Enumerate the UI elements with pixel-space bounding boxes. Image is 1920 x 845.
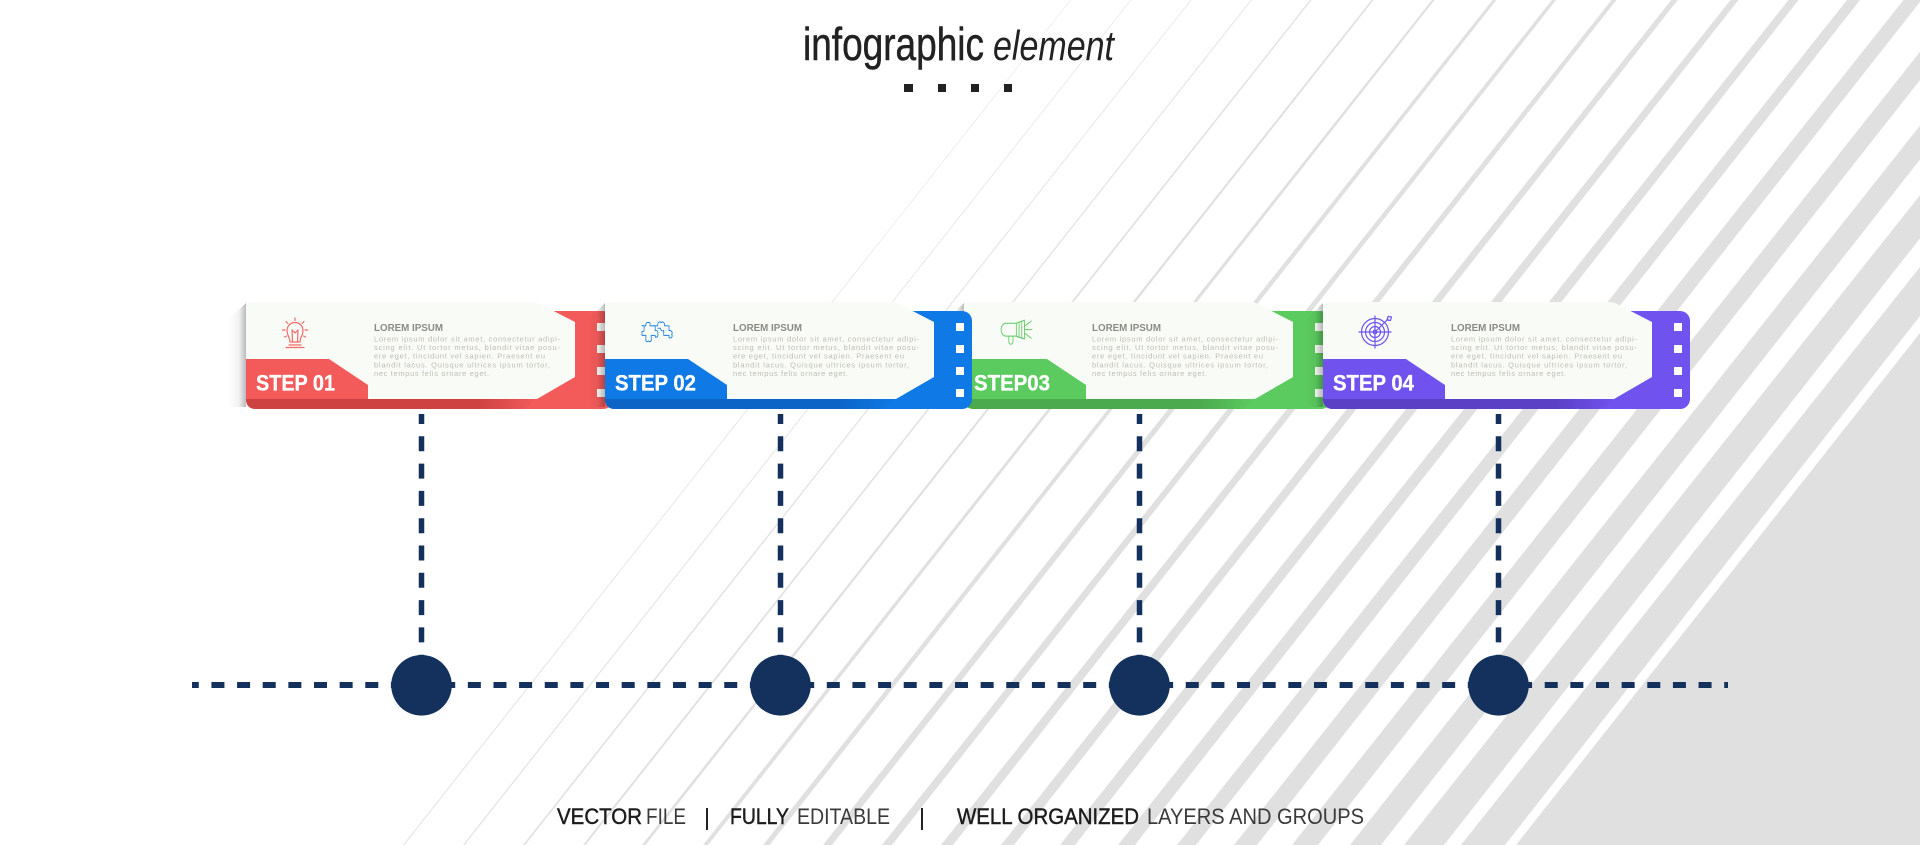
step label tab: STEP 04	[1333, 370, 1415, 396]
text block: nec tempus felis ornare eget.	[1451, 369, 1566, 378]
panel: step 03	[946, 302, 1331, 409]
icon: target	[1359, 316, 1392, 348]
text block: blandit lacus. Quisque ultrices ipsum tortor,	[374, 360, 550, 369]
connector: step 03	[1137, 414, 1142, 656]
text block: LOREM IPSUM	[1451, 322, 1520, 334]
footer caption: FILE	[646, 804, 686, 829]
step label tab: STEP 02	[615, 370, 696, 396]
text block: LOREM IPSUM	[1092, 322, 1161, 334]
title: infographic	[803, 18, 984, 70]
step label tab	[1323, 359, 1445, 399]
text block: ere eget, tincidunt vel sapien. Praesent eu	[1451, 352, 1622, 360]
text block	[1092, 322, 1278, 378]
text block: blandit lacus. Quisque ultrices ipsum tortor,	[1092, 360, 1268, 369]
text block	[1451, 322, 1638, 378]
text block: LOREM IPSUM	[733, 322, 802, 334]
connector: step 04	[1496, 414, 1501, 656]
side perforations	[1674, 323, 1682, 397]
step label tab	[605, 359, 727, 399]
timeline node: step 01	[391, 655, 452, 716]
text block: ere eget, tincidunt vel sapien. Praesent eu	[374, 352, 545, 360]
timeline dashed axis	[192, 682, 1728, 688]
step label tab: STEP 01	[256, 370, 335, 396]
icon: puzzle	[642, 322, 672, 342]
text block: Lorem ipsum dolor sit amet, consectetur adipi-	[733, 335, 920, 344]
text block: scing elit. Ut tortor metus, blandit vitae posu-	[1092, 343, 1278, 352]
timeline node: step 03	[1109, 655, 1170, 716]
panel: step 01	[228, 302, 613, 409]
footer caption: EDITABLE	[797, 804, 890, 829]
step label tab	[246, 359, 368, 399]
footer caption	[557, 804, 1364, 830]
text block: scing elit. Ut tortor metus, blandit vitae posu-	[1451, 343, 1638, 352]
text block: ere eget, tincidunt vel sapien. Praesent eu	[733, 352, 904, 360]
text block: blandit lacus. Quisque ultrices ipsum tortor,	[733, 360, 909, 369]
text block	[733, 322, 920, 378]
connector: step 01	[419, 414, 424, 656]
text block: LOREM IPSUM	[374, 322, 443, 334]
panel: step 02	[587, 302, 972, 409]
text block	[374, 322, 560, 378]
text block: nec tempus felis ornare eget.	[1092, 369, 1207, 378]
side perforations	[597, 323, 605, 397]
text block: scing elit. Ut tortor metus, blandit vitae posu-	[374, 343, 560, 352]
title dots	[904, 84, 1012, 92]
text block: Lorem ipsum dolor sit amet, consectetur adipi-	[374, 335, 560, 344]
text block: Lorem ipsum dolor sit amet, consectetur adipi-	[1451, 335, 1638, 344]
footer caption: WELL ORGANIZED	[957, 804, 1139, 829]
footer caption: LAYERS AND GROUPS	[1147, 804, 1364, 829]
step label tab	[964, 359, 1086, 399]
timeline node: step 04	[1468, 655, 1529, 716]
icon: megaphone	[1001, 320, 1032, 344]
footer caption: FULLY	[730, 804, 789, 829]
side perforations	[1315, 323, 1323, 397]
text block: Lorem ipsum dolor sit amet, consectetur adipi-	[1092, 335, 1278, 344]
text block: scing elit. Ut tortor metus, blandit vitae posu-	[733, 343, 920, 352]
step label tab: STEP03	[974, 370, 1050, 396]
timeline node: step 02	[750, 655, 811, 716]
side perforations	[956, 323, 964, 397]
text block: blandit lacus. Quisque ultrices ipsum tortor,	[1451, 360, 1627, 369]
text block: ere eget, tincidunt vel sapien. Praesent eu	[1092, 352, 1263, 360]
panel: step 04	[1305, 302, 1690, 409]
connector: step 02	[778, 414, 783, 656]
text block: nec tempus felis ornare eget.	[733, 369, 848, 378]
icon: light bulb	[282, 318, 308, 348]
text block: nec tempus felis ornare eget.	[374, 369, 489, 378]
title: element	[993, 22, 1116, 69]
footer caption: VECTOR	[557, 804, 642, 829]
